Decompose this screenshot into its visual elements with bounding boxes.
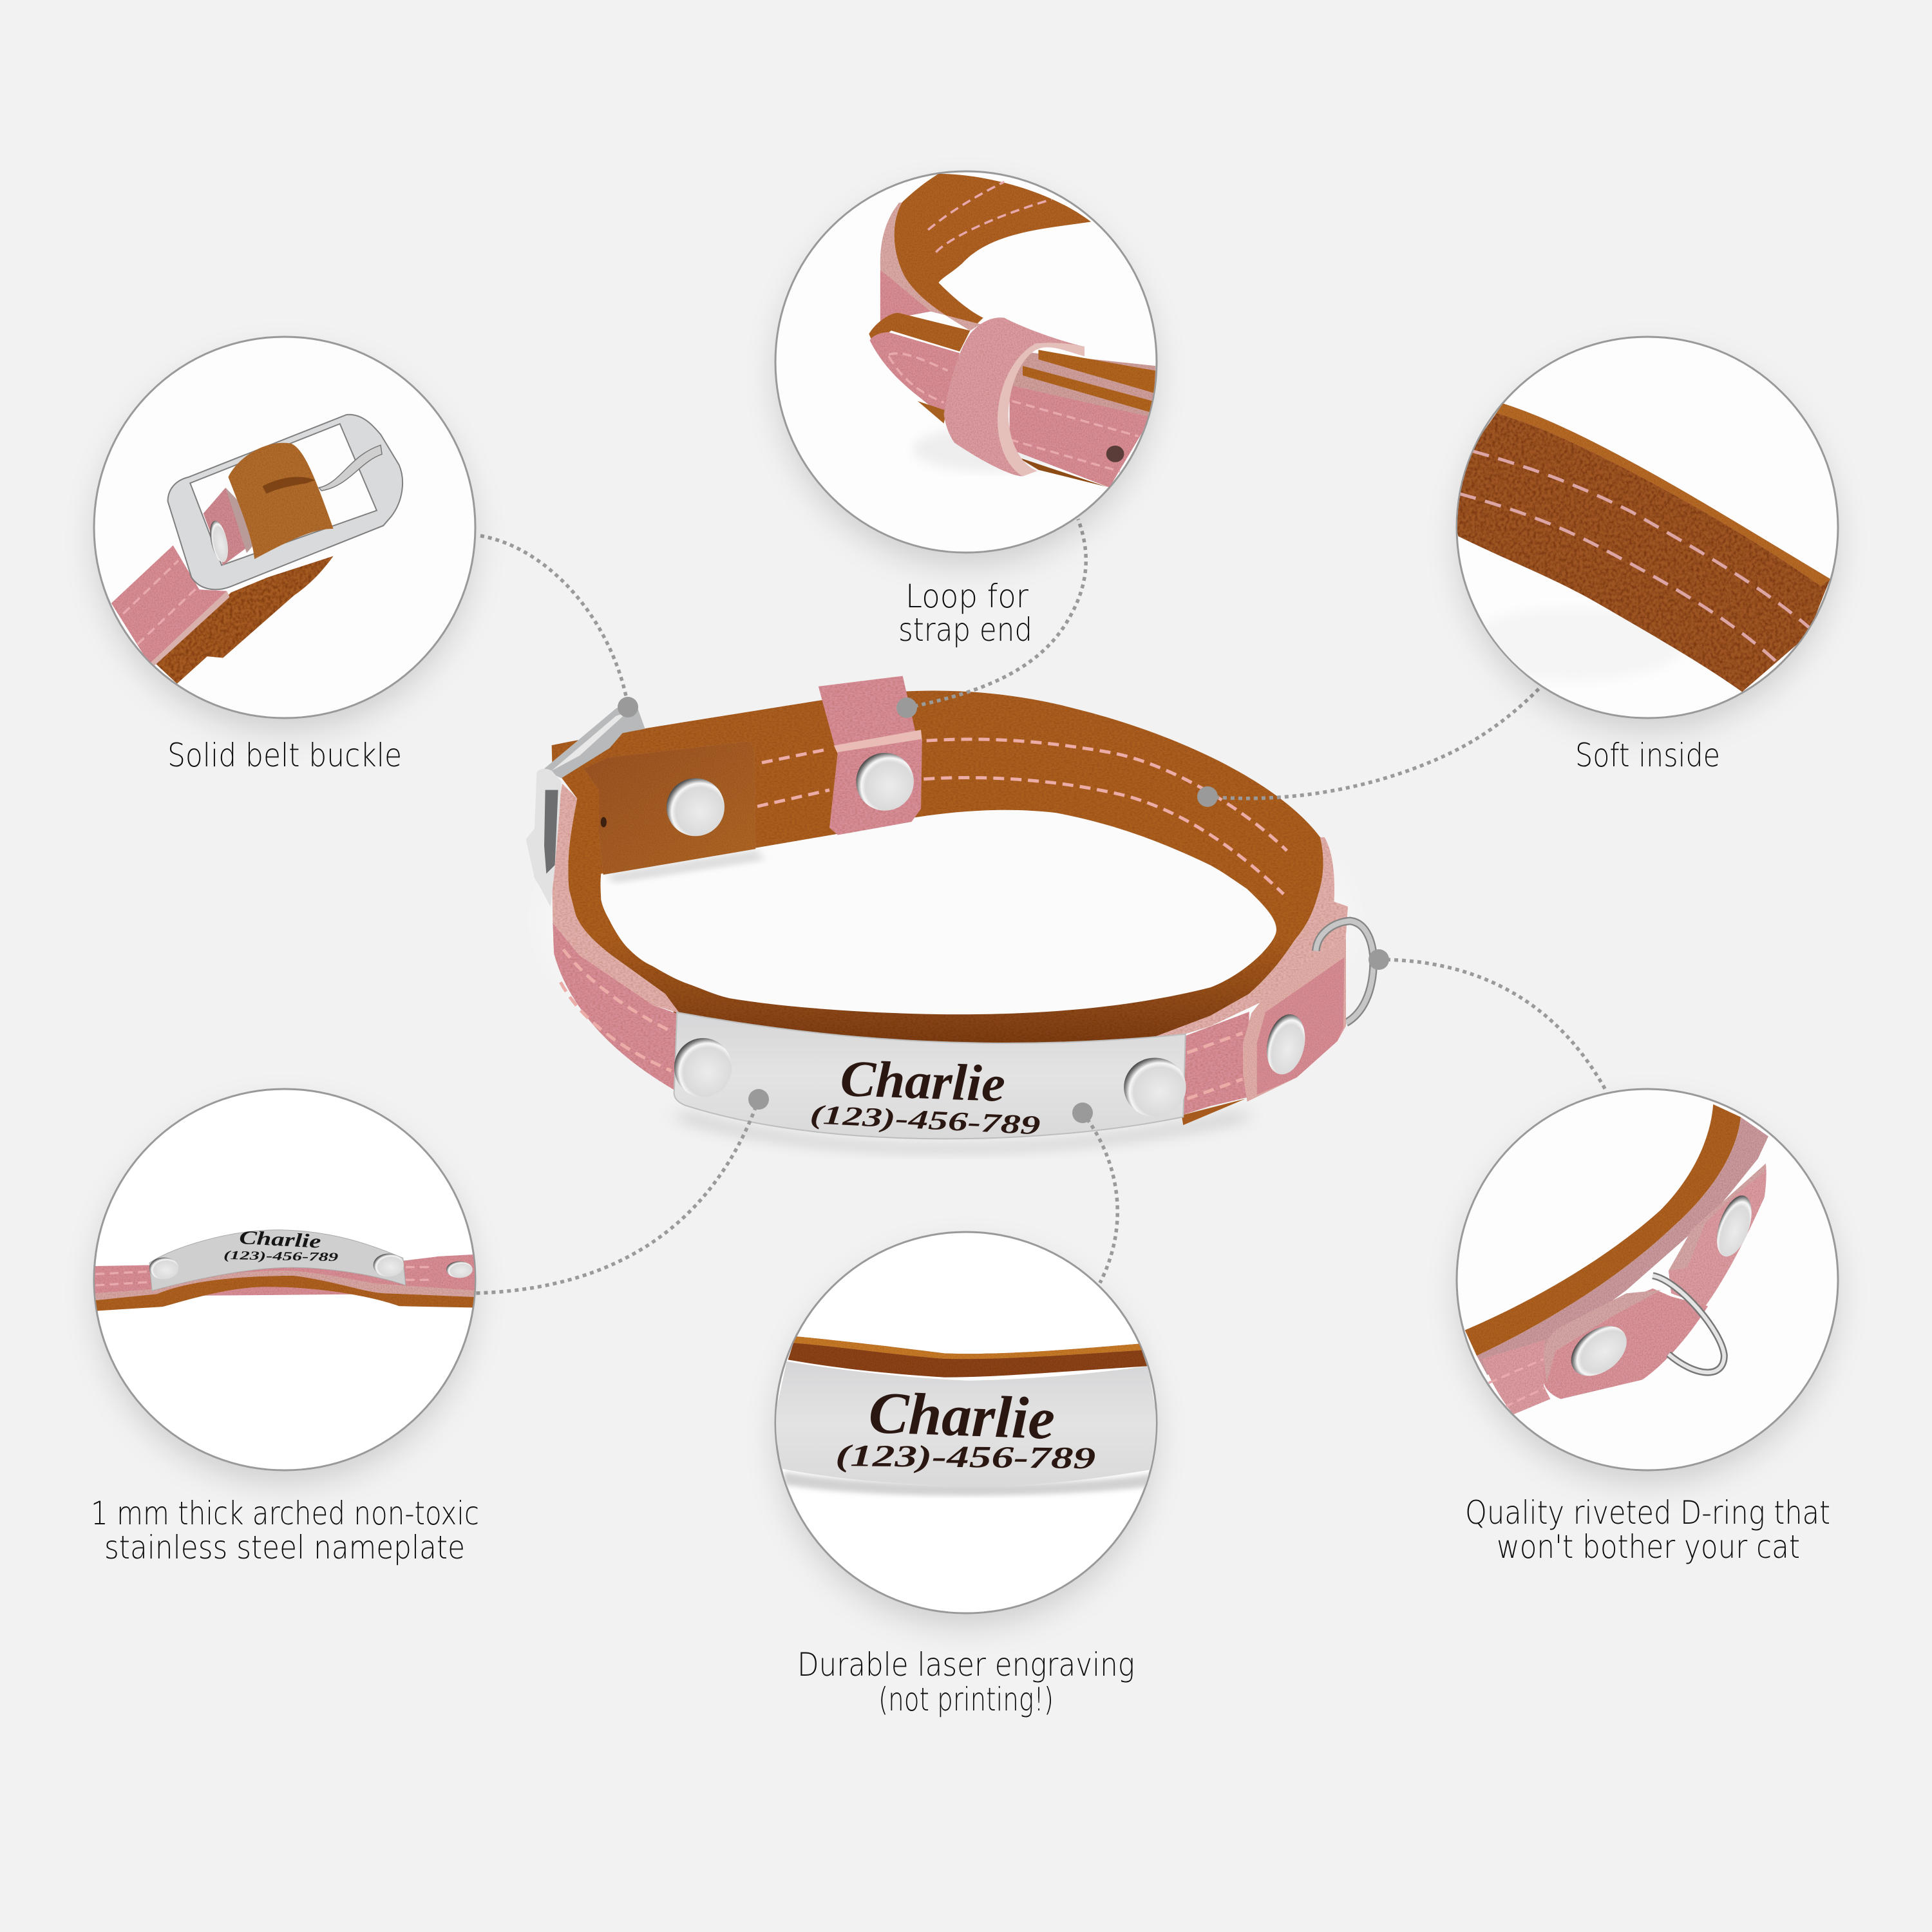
dot: loop [896,697,917,718]
left stitches [564,949,672,1032]
engraved name: Charlie [839,1050,1006,1113]
nameplate [674,1012,1186,1139]
connector: nameplate [475,1099,759,1293]
caption: loop for strap end [898,578,1032,649]
connector: D-ring [1379,960,1606,1091]
caption: loop for strap end: strap end [898,611,1032,649]
large engraved phone: (123)-456-789 [835,1439,1095,1475]
engraving close-up [773,1336,1159,1495]
tab edge [1243,938,1346,1102]
caption: riveted D-ring: won't bother your cat [1497,1528,1800,1566]
caption: laser engraving: Durable laser engraving [797,1646,1135,1683]
panel: solid belt buckle [94,337,475,718]
buckle and leather patch detail [526,702,755,907]
right pink edge [1151,837,1348,1045]
panel: arched nameplate [94,1089,478,1470]
nameplate side view [94,1230,478,1311]
soft inside close-up [1453,403,1830,692]
loop close-up [869,174,1155,488]
connector: engraving [1083,1113,1117,1283]
caption: riveted D-ring: Quality riveted D-ring that [1465,1494,1830,1531]
right stitches [1187,1033,1242,1053]
pink strap left [553,923,681,1090]
main collar photo [526,676,1374,1154]
plate rivet left [674,1038,732,1097]
leather patch [584,742,755,875]
shadow under patch [608,849,763,884]
large engraved name: Charlie [867,1379,1056,1452]
patch hole [601,817,607,828]
right stitches second row [1187,1079,1242,1099]
buckle bar highlight [552,713,627,771]
dot: soft inside [1197,786,1218,807]
panel: soft inside [1453,337,1838,718]
buckle dark insert [544,790,558,874]
connector: buckle [480,536,628,705]
tab face [1257,958,1344,1095]
connector: soft inside [1208,687,1541,799]
soft floor glow [558,749,1334,1090]
buckle side [526,769,562,907]
dot: buckle [618,697,638,717]
brown under right strap [1182,1099,1245,1125]
pink edge left and front [552,784,680,1014]
loop for strap end [819,676,922,835]
panel: riveted D-ring [1457,1089,1838,1470]
panel: loop for strap end [775,171,1157,553]
D-ring close-up [1465,1104,1768,1414]
D-ring tab detail [1243,921,1374,1102]
patch rivet [667,778,724,836]
connector: loop [907,519,1086,708]
plate rivet right [1124,1057,1186,1117]
caption: solid belt buckle: Solid belt buckle [167,737,402,774]
dot: nameplate [748,1089,769,1110]
tab rivet [1262,1010,1311,1078]
caption: riveted D-ring [1465,1494,1830,1566]
small engraved name: Charlie [239,1227,321,1253]
shadow under nameplate [680,1107,1245,1154]
caption: arched nameplate: stainless steel nameplate [104,1529,465,1566]
panel: laser engraving [773,1232,1159,1613]
brown suede inner ring [552,691,1323,1043]
buckle bar [543,702,645,778]
caption: soft inside: Soft inside [1575,737,1720,774]
caption: loop for strap end: Loop for [905,578,1028,615]
buckle close-up [111,415,402,684]
dot: engraving [1072,1103,1093,1123]
dot: D-ring [1368,949,1389,970]
left stitches second row [560,982,672,1071]
caption: arched nameplate [91,1495,479,1566]
D-ring [1316,921,1374,1023]
caption: arched nameplate: 1 mm thick arched non-toxic [91,1495,479,1532]
inner stitches bottom row [757,777,1283,894]
inner stitches top row [762,739,1287,851]
engraved phone: (123)-456-789 [810,1100,1041,1141]
pink strap right of plate [1182,1012,1249,1115]
small engraved phone: (123)-456-789 [223,1249,339,1264]
caption: laser engraving [797,1646,1135,1718]
caption: laser engraving: (not printing!) [878,1681,1054,1718]
